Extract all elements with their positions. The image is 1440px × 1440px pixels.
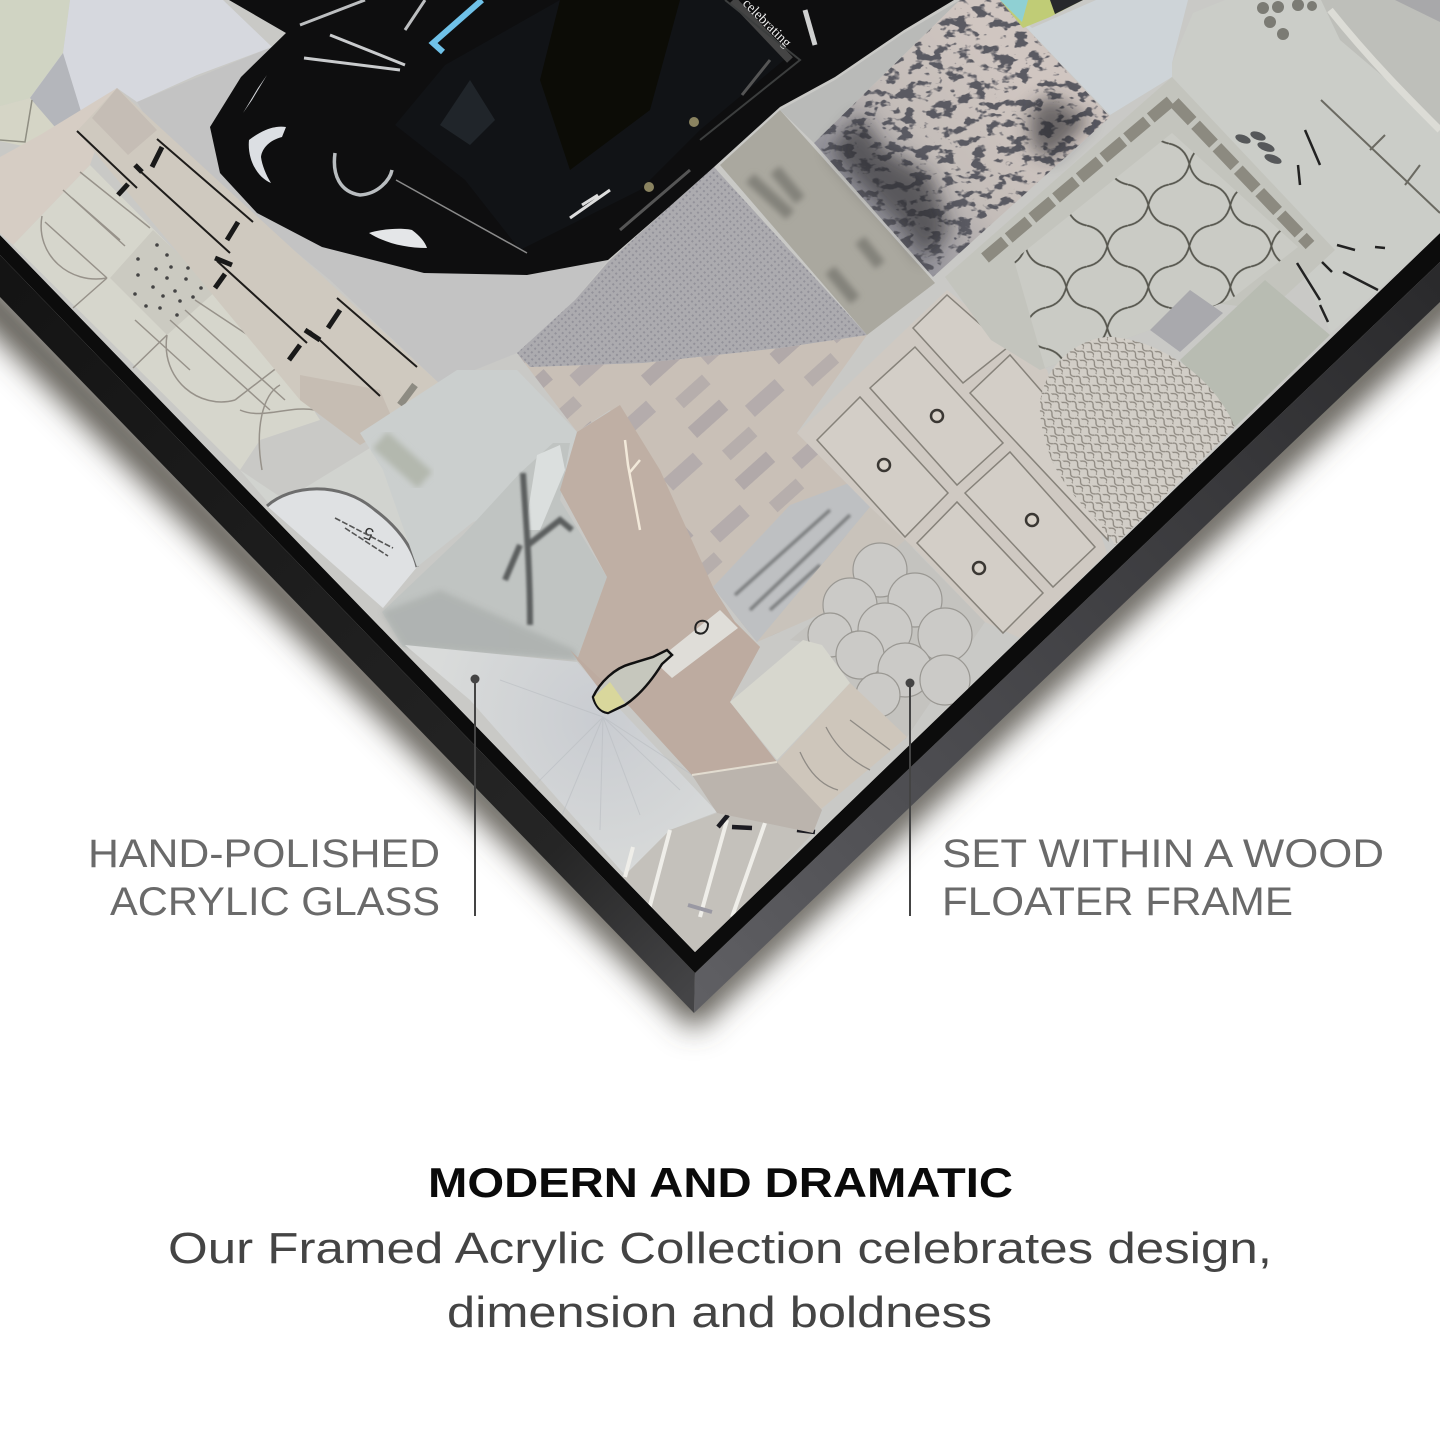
patch: scallop tiles [807,542,973,716]
callout text line one: SET WITHIN A WOOD [942,832,1384,876]
body line two: dimension and boldness [447,1288,992,1337]
patch: marble panel upper right [1257,0,1440,234]
frame front edge [0,233,1440,973]
patch: grey band above speckled print [780,0,960,143]
patch: lattice tile with window strip [945,77,1385,370]
patch: pale green paper [0,0,70,106]
body line one: Our Framed Acrylic Collection celebrates design, [168,1224,1272,1273]
patch: circular label paper [242,448,418,608]
handwritten note: 5 [361,523,376,544]
magazine word [733,0,790,60]
patch: pink chevron [0,88,117,245]
black patent bag blob [210,0,954,275]
frame right side [694,262,1440,1013]
patch: cream square and tan panels [570,620,907,833]
frame [0,233,1440,1013]
patch: marbled brown band [720,110,935,335]
patch: beaded tile strip [77,88,440,445]
patch: bottom corner tiles [623,813,816,952]
label strip [655,610,738,678]
collage artwork [0,0,1440,960]
heading: MODERN AND DRAMATIC [428,1159,1013,1206]
patch: grey ground around blob [137,33,608,384]
bottle [593,650,672,713]
callout: wood floater frame [906,678,1384,924]
callout marker dot [906,678,914,688]
patch: blue paper [1026,0,1188,115]
icon: knitted pouf [1040,337,1235,545]
patch: pale green mottled panel [1150,280,1330,427]
icon: champagne bottle on label [593,610,738,713]
drop shadow [0,240,1440,1030]
patch: pink marble checks [518,335,867,586]
pebbles [1257,0,1317,40]
callout marker dot [470,674,480,684]
blue tape mark [433,0,482,52]
heart [695,621,708,634]
callout: hand-polished acrylic glass [88,674,480,924]
dot grid [133,243,203,317]
bag seams and highlights [396,180,527,253]
white spots [243,75,267,113]
bag panel sheen [395,0,790,250]
drawer knobs [878,410,1038,574]
callout leader line [474,680,476,916]
patch: tan strip beside scallops [770,508,912,636]
callout leader line [909,685,911,916]
patch: colorful strip at top [1000,0,1083,28]
patch: grey marble [382,443,607,660]
patch: small chevron tile [0,98,55,147]
patch: speckled dark print [814,0,1110,277]
patch: white burst panel [405,645,717,875]
patch: line drawing tiles [13,165,320,470]
patch: cabinet with drawers [797,290,1110,638]
body text [168,1224,1272,1337]
callout text line one: HAND-POLISHED [88,832,440,876]
frame left side [0,255,695,1013]
callout text line two: ACRYLIC GLASS [110,880,440,924]
patch: grey streaked marble [713,480,870,642]
callout text line two: FLOATER FRAME [942,880,1293,924]
patch: woven grey fabric [517,167,867,367]
patch: pale blue grey panel [360,370,475,567]
patch: tan paper [560,405,777,775]
dark oval tile marks [1235,131,1282,164]
patch: white blue paper [30,0,272,135]
